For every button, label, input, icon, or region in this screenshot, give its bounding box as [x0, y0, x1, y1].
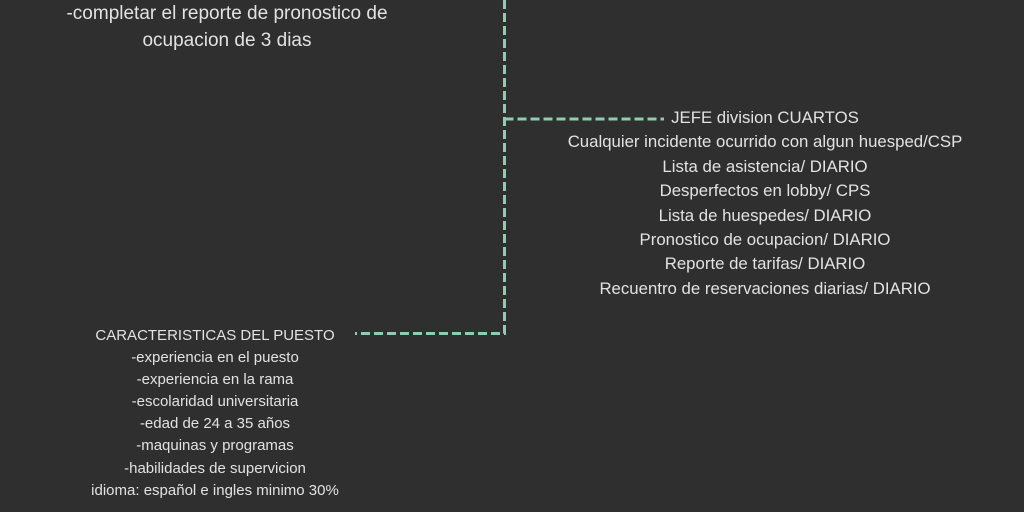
text block: caracteristicas del puesto: -experiencia en la rama	[137, 371, 293, 388]
text block: caracteristicas del puesto: CARACTERISTICAS DEL PUESTO	[95, 327, 335, 344]
text block: JEFE division CUARTOS: Reporte de tarifas/ DIARIO	[665, 254, 865, 273]
text block: JEFE division CUARTOS	[568, 108, 962, 298]
text block: top tasks: -completar el reporte de pronostico de	[66, 3, 388, 24]
text block: caracteristicas del puesto: -experiencia en el puesto	[131, 349, 299, 366]
text block: caracteristicas del puesto: -edad de 24 a 35 años	[140, 415, 290, 432]
text block: caracteristicas del puesto	[91, 327, 339, 499]
text block: caracteristicas del puesto: idioma: español e ingles minimo 30%	[91, 482, 339, 499]
text block: top tasks	[66, 3, 388, 51]
text block: JEFE division CUARTOS: Cualquier incidente ocurrido con algun huesped/CSP	[568, 132, 962, 151]
text block: JEFE division CUARTOS: Lista de asistencia/ DIARIO	[662, 157, 868, 176]
text block: JEFE division CUARTOS: Lista de huespedes/ DIARIO	[659, 206, 871, 225]
text block: top tasks: ocupacion de 3 dias	[142, 30, 312, 51]
text block: caracteristicas del puesto: -habilidades de supervicion	[124, 460, 306, 477]
text block: JEFE division CUARTOS: Pronostico de ocupacion/ DIARIO	[640, 230, 890, 249]
text block: JEFE division CUARTOS: JEFE division CUARTOS	[671, 108, 859, 127]
text block: JEFE division CUARTOS: Recuentro de reservaciones diarias/ DIARIO	[599, 279, 931, 298]
text block: caracteristicas del puesto: -escolaridad universitaria	[132, 393, 298, 410]
text block: JEFE division CUARTOS: Desperfectos en lobby/ CPS	[660, 181, 870, 200]
text block: caracteristicas del puesto: -maquinas y programas	[136, 437, 294, 454]
